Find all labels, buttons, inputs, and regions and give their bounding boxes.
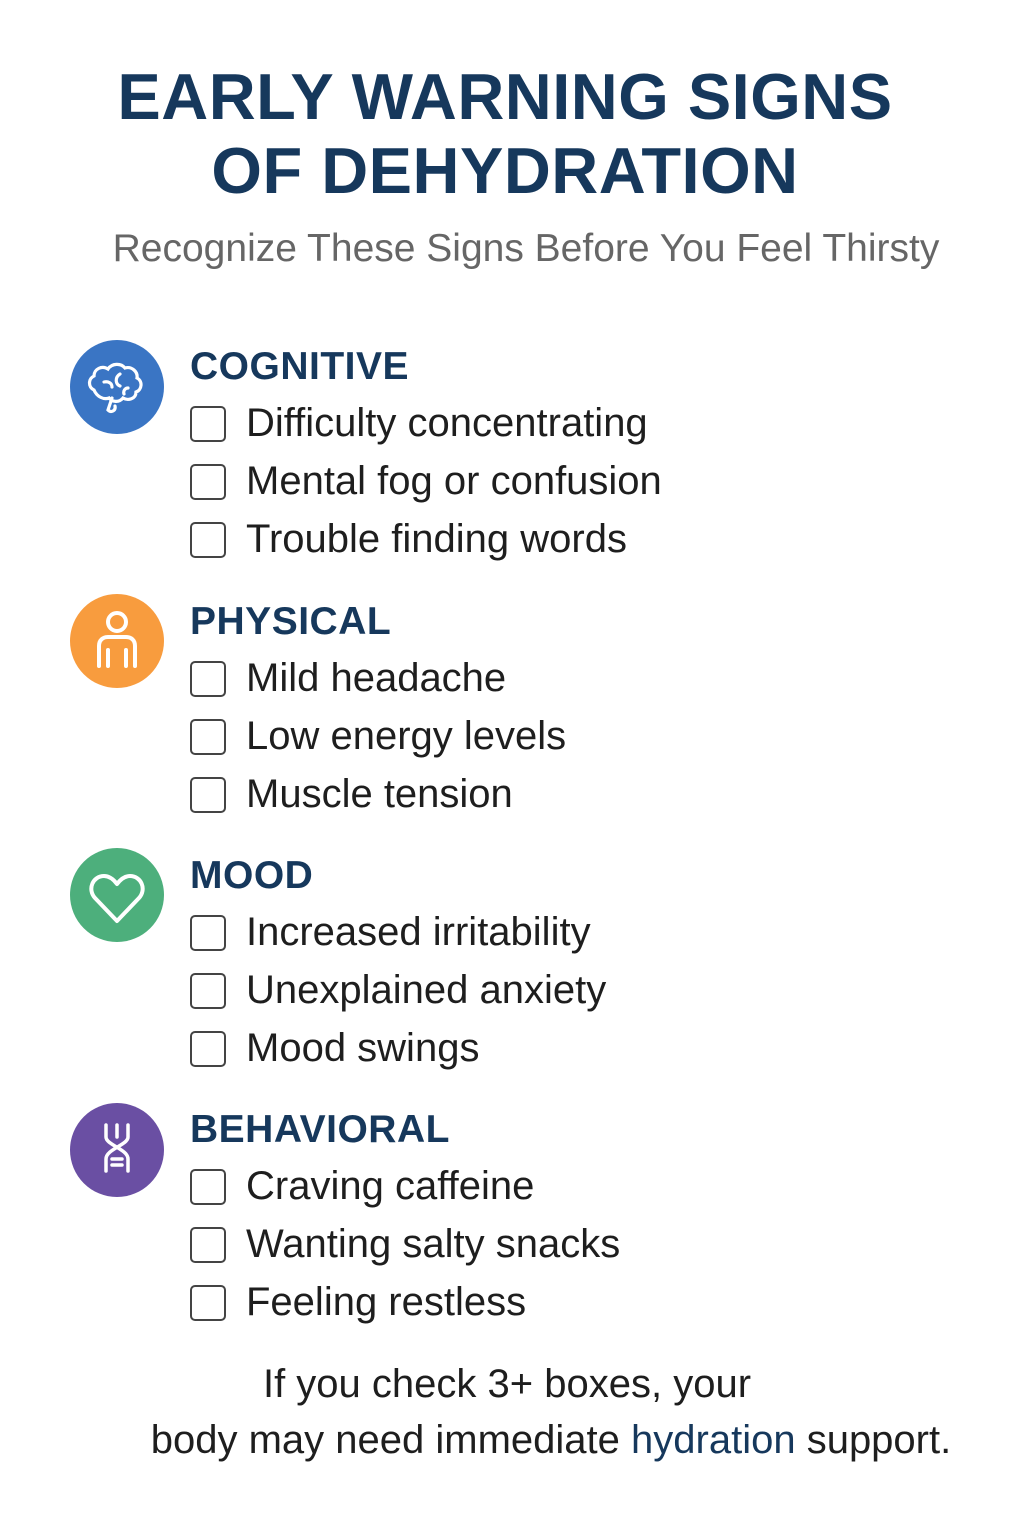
heading: cognitive: COGNITIVE xyxy=(190,345,409,388)
panel: cognitive: Difficulty concentrating xyxy=(246,401,648,445)
heading: physical: PHYSICAL xyxy=(190,600,391,643)
footer note: body may need immediate hydration support. xyxy=(151,1418,951,1462)
icon: dna xyxy=(70,1103,164,1197)
subtitle: Recognize These Signs Before You Feel Thirsty xyxy=(113,227,939,270)
panel: physical: Muscle tension xyxy=(246,772,513,816)
panel: physical xyxy=(190,600,566,816)
footer note: If you check 3+ boxes, your xyxy=(263,1362,751,1406)
icon: person xyxy=(70,594,164,688)
title xyxy=(117,60,893,207)
icon: heart xyxy=(70,848,164,942)
panel: mood xyxy=(190,854,606,1070)
title: EARLY WARNING SIGNS xyxy=(117,60,893,133)
panel: cognitive xyxy=(190,345,662,561)
panel: mood: Increased irritability xyxy=(246,910,591,954)
panel: mood: Unexplained anxiety xyxy=(246,968,606,1012)
panel: physical: Low energy levels xyxy=(246,714,566,758)
icon: brain xyxy=(70,340,164,434)
panel: behavioral: Wanting salty snacks xyxy=(246,1222,620,1266)
panel: behavioral: Feeling restless xyxy=(246,1280,526,1324)
panel: cognitive: Trouble finding words xyxy=(246,517,627,561)
panel: physical: Mild headache xyxy=(246,656,506,700)
heading: mood: MOOD xyxy=(190,854,313,897)
panel: behavioral xyxy=(190,1108,620,1324)
panel: cognitive: Mental fog or confusion xyxy=(246,459,662,503)
title: OF DEHYDRATION xyxy=(211,134,799,207)
footer note xyxy=(151,1362,951,1462)
panel: mood: Mood swings xyxy=(246,1026,479,1070)
heading: behavioral: BEHAVIORAL xyxy=(190,1108,450,1151)
panel: behavioral: Craving caffeine xyxy=(246,1164,534,1208)
